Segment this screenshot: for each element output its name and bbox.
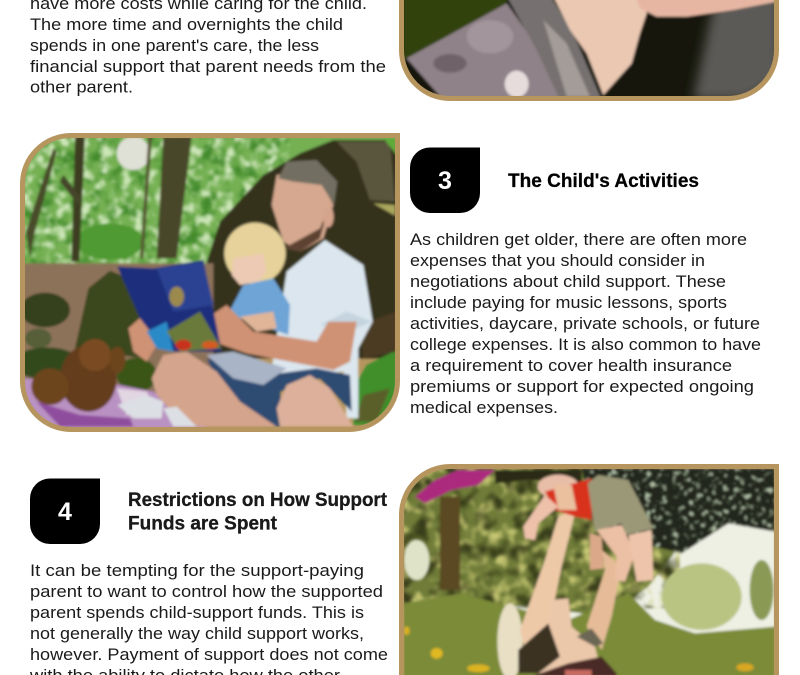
baby bbox=[538, 475, 579, 499]
shorts and child leg bbox=[207, 358, 352, 427]
text: section 3 body: expenses that you should consider in bbox=[410, 251, 705, 270]
photo: father reading to toddler in forest, gold frame bbox=[13, 133, 400, 432]
sky bbox=[404, 469, 774, 636]
text: section 4 body bbox=[29, 561, 388, 675]
text: section 4 body: parent spends child-support funds. This is bbox=[30, 603, 364, 622]
blanket bbox=[23, 378, 207, 428]
mother arms and neck bbox=[520, 507, 577, 650]
text: section 2 body bbox=[30, 0, 386, 96]
teddy bear bbox=[60, 345, 117, 412]
tree trunks bbox=[157, 137, 192, 258]
moss right bbox=[353, 350, 397, 425]
sunlit tree foliage left bbox=[403, 468, 682, 617]
child shirt bbox=[228, 278, 290, 335]
text: section 3 body: medical expenses. bbox=[410, 398, 558, 417]
badge: number 4: 4 bbox=[58, 498, 72, 526]
child hair and face bbox=[224, 223, 286, 284]
photo: child's arm and sleeve in gold frame bbox=[399, 0, 783, 103]
shoes bbox=[117, 395, 163, 418]
sky and foliage bbox=[23, 137, 397, 270]
meadow bbox=[403, 593, 775, 675]
father shirt bbox=[270, 240, 373, 418]
pale distant trees bbox=[662, 563, 742, 630]
trunk and magenta blossom bbox=[440, 497, 460, 590]
text: section 2 body: The more time and overnights the child bbox=[30, 15, 343, 34]
dark canopy right bbox=[582, 468, 775, 553]
dress bbox=[518, 623, 560, 673]
boulder behind father bbox=[207, 140, 397, 358]
text: section 2 body: other parent. bbox=[30, 78, 133, 96]
text: section 3 body: include paying for music lessons, sports bbox=[410, 293, 727, 312]
text: section 2 body: spends in one parent's care, the less bbox=[30, 36, 319, 55]
text: section 4 body: not generally the way child support works, bbox=[30, 624, 364, 643]
father head bbox=[272, 172, 333, 252]
text: section 3 body: premiums or support for expected ongoing bbox=[410, 377, 754, 396]
badge: number 3: 3 bbox=[438, 167, 452, 195]
mother hair bbox=[497, 603, 523, 675]
text: section 3 body: negotiations about child support. These bbox=[410, 272, 726, 291]
text: section 4 body: It can be tempting for the support-paying bbox=[30, 561, 364, 580]
heading: Restrictions on How Support Funds are Spent bbox=[128, 490, 388, 534]
text: section 3 body: activities, daycare, private schools, or future bbox=[410, 314, 760, 333]
text: section 2 body: financial support that parent needs from the bbox=[30, 57, 386, 76]
father legs bbox=[152, 352, 277, 427]
text: section 3 body: college expenses. It is also common to have bbox=[410, 335, 761, 354]
book bbox=[117, 260, 222, 352]
badge: number 4 bbox=[30, 478, 100, 544]
heading: Restrictions on How Support Funds are Spent: Restrictions on How Support bbox=[128, 490, 388, 511]
heading: Restrictions on How Support Funds are Spent: Funds are Spent bbox=[128, 514, 278, 534]
child arm and father's arm bbox=[240, 312, 277, 332]
heading: The Child's Activities: The Child's Activities bbox=[508, 171, 699, 192]
text: section 3 body bbox=[410, 230, 761, 417]
photo: mother lifting baby outdoors, gold frame bbox=[399, 464, 779, 675]
text: section 3 body: a requirement to cover health insurance bbox=[410, 356, 732, 375]
text: section 4 body: parent to want to control how the supported bbox=[30, 582, 383, 601]
forest ground bbox=[23, 263, 213, 397]
text: section 4 body: however. Payment of support does not come bbox=[30, 645, 388, 664]
text: section 3 body: As children get older, there are often more bbox=[410, 230, 747, 249]
badge: number 3 bbox=[410, 148, 480, 213]
